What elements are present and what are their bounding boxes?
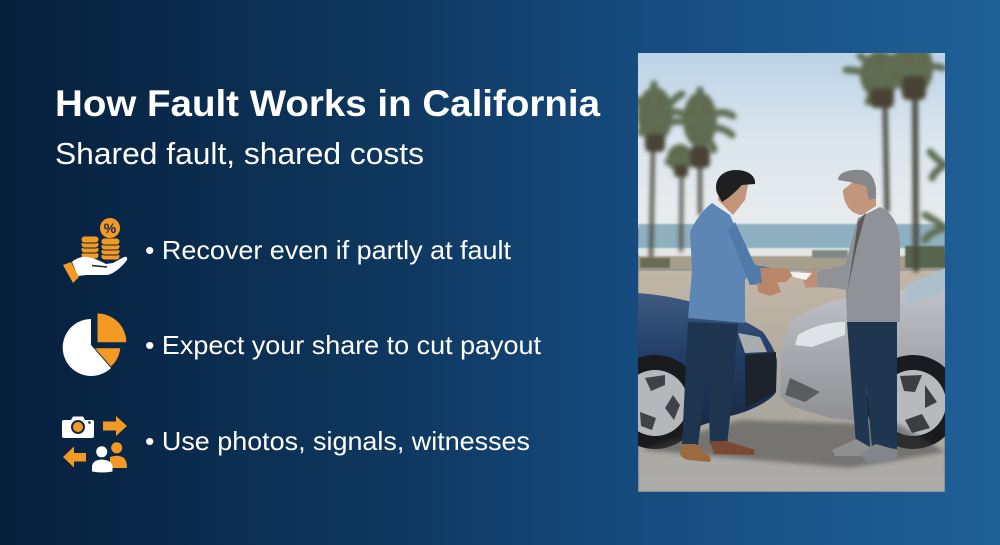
- bullet: use photos, signals, witnesses: • Use photos, signals, witnesses: [145, 426, 530, 456]
- road: [638, 270, 945, 492]
- car: silver: [780, 268, 960, 449]
- papers exchanged: [790, 272, 812, 280]
- title: How Fault Works in California: [55, 83, 600, 124]
- bullet: expect your share to cut payout: • Expect your share to cut payout: [145, 330, 542, 360]
- ocean: [638, 224, 945, 252]
- icon: hand holding coins with percent: %: [104, 220, 117, 236]
- icon: pie chart: [63, 314, 126, 376]
- man on right in grey jacket: [800, 170, 900, 463]
- subtitle: Shared fault, shared costs: [55, 136, 424, 171]
- icon: hand holding coins with percent: [63, 218, 127, 283]
- bullet: recover even if partly at fault: • Recover even if partly at fault: [145, 235, 512, 265]
- car: dark blue: [638, 293, 777, 449]
- icon: camera, arrows and people: [62, 416, 127, 472]
- man on left in blue shirt: [680, 170, 794, 462]
- photo: two drivers exchanging papers after collision: [638, 53, 945, 492]
- palm trees: [637, 40, 945, 272]
- sky: [638, 53, 945, 228]
- shoreline: [638, 246, 945, 270]
- road shadow: [640, 420, 945, 468]
